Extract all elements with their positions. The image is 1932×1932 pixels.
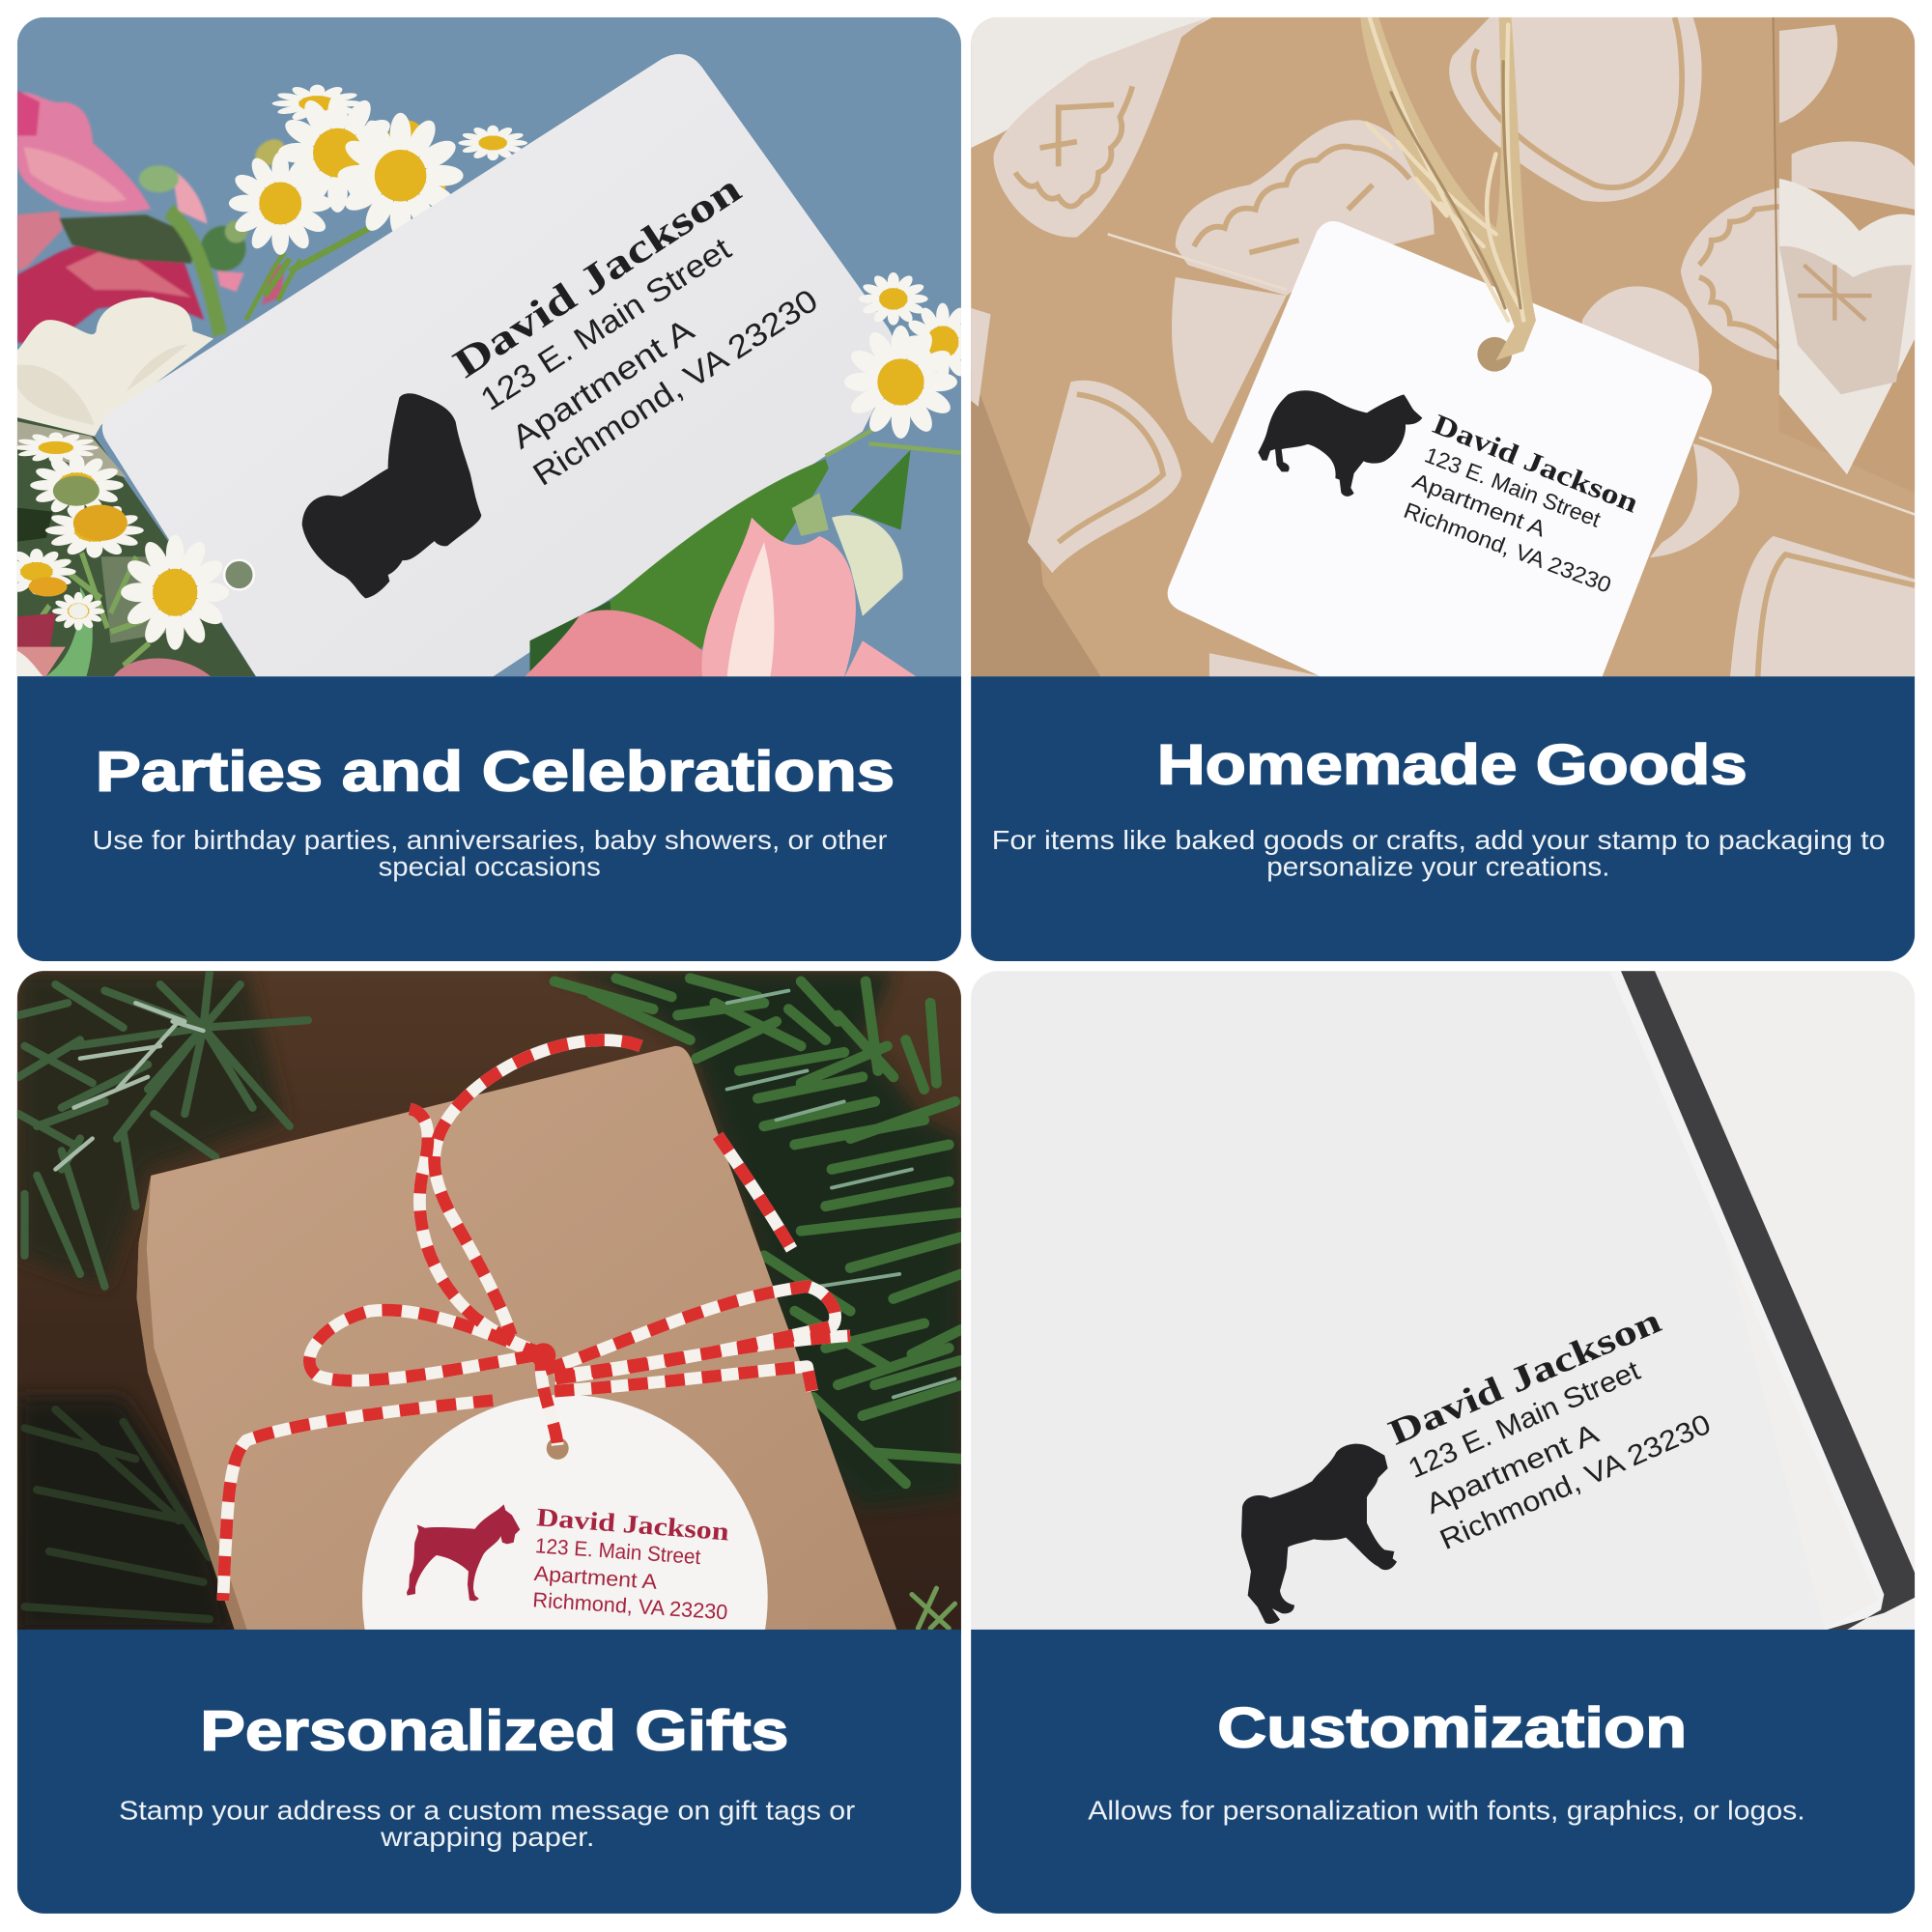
heading: Parties and Celebrations — [96, 740, 895, 803]
heading: Homemade Goods — [1157, 733, 1747, 796]
address text: Apartment A — [1409, 468, 1550, 542]
tag hole — [547, 1437, 569, 1460]
paper line details — [1015, 17, 1915, 678]
caption band — [17, 1630, 961, 1919]
address text: David Jackson — [1383, 1301, 1667, 1453]
photo: wrapped gift with twine — [17, 971, 961, 1639]
leaves and lily — [524, 425, 961, 678]
icon: daisies behind tag — [229, 85, 527, 296]
description: For items like baked goods or crafts, add your stamp to packaging to — [992, 825, 1886, 855]
address text: Apartment A — [533, 1561, 659, 1594]
photo: kraft package with tag — [971, 17, 1915, 681]
address text: Richmond, VA 23230 — [1401, 497, 1615, 598]
address text: David Jackson — [535, 1502, 730, 1546]
notebook spine — [1621, 971, 1915, 1634]
address text: Richmond, VA 23230 — [532, 1587, 728, 1624]
icon: small daisies — [0, 433, 144, 631]
tag card — [102, 54, 895, 681]
description — [93, 825, 887, 881]
twine — [1360, 17, 1536, 360]
wrapping paper hearts — [971, 17, 1915, 678]
left flower bunch — [0, 91, 300, 676]
fir branches — [18, 972, 961, 1629]
icon: dog silhouette — [302, 393, 481, 598]
tag hole — [1477, 337, 1512, 372]
round tag — [362, 1395, 768, 1630]
address text: David Jackson — [445, 166, 749, 387]
icon: dog silhouette — [407, 1504, 520, 1601]
red and white twine — [223, 1040, 850, 1601]
gift box — [137, 1046, 899, 1637]
panel: parties and celebrations — [0, 17, 981, 966]
description: Use for birthday parties, anniversaries, baby showers, or other — [93, 825, 887, 855]
address text: 123 E. Main Street — [1404, 1354, 1645, 1485]
description: Allows for personalization with fonts, graphics, or logos. — [1088, 1795, 1805, 1825]
address text: Richmond, VA 23230 — [526, 283, 824, 494]
description: wrapping paper. — [380, 1822, 594, 1852]
description — [992, 825, 1886, 881]
description: personalize your creations. — [1266, 851, 1610, 881]
address text: David Jackson — [1429, 409, 1642, 520]
address text — [1401, 409, 1642, 598]
description — [119, 1795, 855, 1852]
address text: Richmond, VA 23230 — [1435, 1408, 1716, 1556]
address text — [451, 184, 815, 485]
photo: tag in flowers — [0, 17, 981, 681]
address text: Apartment A — [505, 312, 701, 456]
panel: homemade goods — [971, 17, 1915, 966]
caption band — [17, 676, 961, 966]
icon: daisies in front — [121, 272, 981, 650]
address text: Apartment A — [1421, 1417, 1604, 1520]
heading: Customization — [1217, 1697, 1687, 1760]
package fold lines — [1108, 234, 1915, 515]
icon: dog silhouette — [1258, 390, 1422, 497]
address text — [533, 1509, 728, 1619]
heading: Personalized Gifts — [200, 1699, 788, 1762]
caption band — [971, 1630, 1915, 1919]
paper heart cutout — [1779, 179, 1915, 474]
address text: 123 E. Main Street — [474, 231, 737, 418]
tag card — [1168, 221, 1712, 681]
address text: 123 E. Main Street — [534, 1533, 701, 1569]
description: Stamp your address or a custom message on gift tags or — [119, 1795, 855, 1825]
photo: stamped notebook page — [971, 971, 1915, 1634]
address text: 123 E. Main Street — [1421, 441, 1605, 532]
caption band — [971, 676, 1915, 966]
tag hole — [224, 560, 254, 589]
address text — [1383, 1301, 1716, 1556]
icon: dog silhouette — [1241, 1444, 1397, 1624]
description: special occasions — [379, 851, 601, 881]
panel: customization — [971, 971, 1915, 1919]
panel: personalized gifts — [17, 971, 961, 1919]
